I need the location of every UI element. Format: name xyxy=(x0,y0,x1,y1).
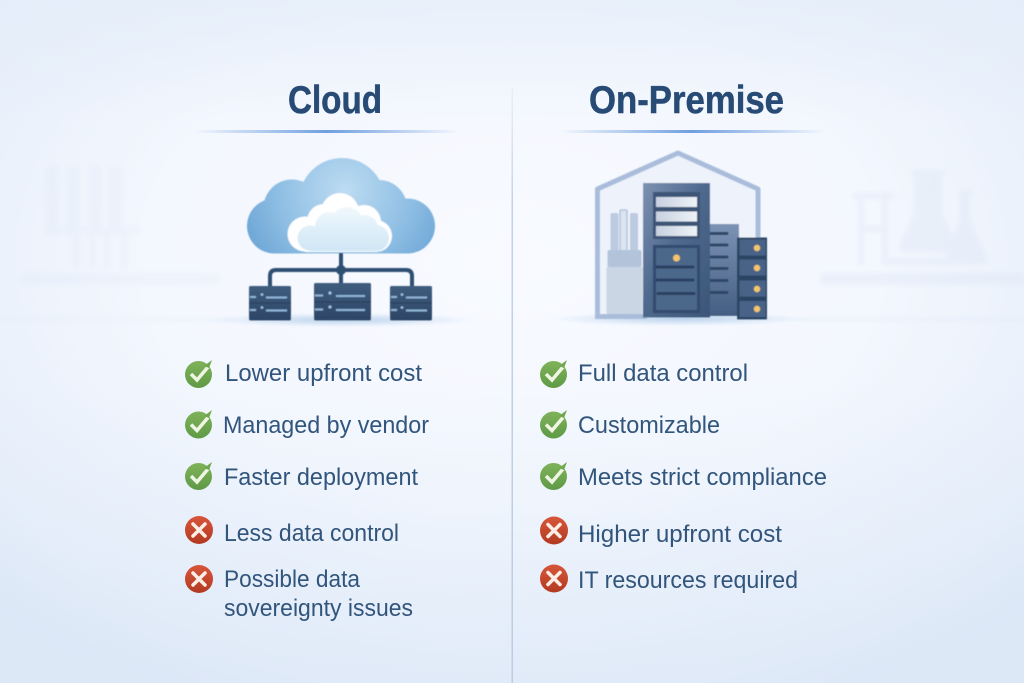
item: full data control: Full data control xyxy=(578,360,748,387)
heading underline xyxy=(560,130,825,133)
connector lines xyxy=(270,253,412,286)
house outline xyxy=(598,153,758,317)
icon: cloud network with servers xyxy=(206,158,476,327)
cons list: on-premise xyxy=(540,516,798,594)
item: possible data sovereignty issues: Possible data xyxy=(224,566,360,593)
center divider xyxy=(512,88,513,683)
right server xyxy=(390,286,432,320)
pros list: cloud xyxy=(185,360,429,491)
item: faster deployment: Faster deployment xyxy=(224,464,418,491)
heading: On-Premise: On-Premise xyxy=(589,79,784,122)
faint laboratory shelf, left background xyxy=(0,166,230,321)
item: lower upfront cost: Lower upfront cost xyxy=(225,360,422,387)
heading underline xyxy=(195,130,460,133)
cable bundle xyxy=(606,210,642,314)
rack units xyxy=(737,238,767,320)
large blue cloud xyxy=(247,158,435,254)
secondary tower xyxy=(709,224,739,316)
item: customizable: Customizable xyxy=(578,412,720,439)
inner pale cloud xyxy=(298,207,389,251)
faint laboratory flasks, right background xyxy=(800,170,1024,321)
item: managed by vendor: Managed by vendor xyxy=(223,412,429,439)
item: less data control xyxy=(185,516,399,547)
cons list: cloud xyxy=(185,516,413,622)
panel: cloud xyxy=(185,79,476,622)
icon: data center building xyxy=(550,153,810,326)
item: less data control: Less data control xyxy=(224,520,399,547)
pros list: on-premise xyxy=(540,360,827,491)
item: possible data sovereignty issues: sovereignty issues xyxy=(224,595,413,622)
item: IT resources required: IT resources required xyxy=(578,567,798,594)
item: possible data sovereignty issues xyxy=(185,565,413,622)
middle server xyxy=(314,283,371,320)
panel: on-premise xyxy=(540,79,827,594)
left server xyxy=(249,286,291,320)
heading: Cloud: Cloud xyxy=(288,79,382,122)
main tower xyxy=(643,183,710,318)
item: meets strict compliance: Meets strict compliance xyxy=(578,464,827,491)
small white cloud xyxy=(288,193,392,252)
item: higher upfront cost: Higher upfront cost xyxy=(578,521,782,548)
